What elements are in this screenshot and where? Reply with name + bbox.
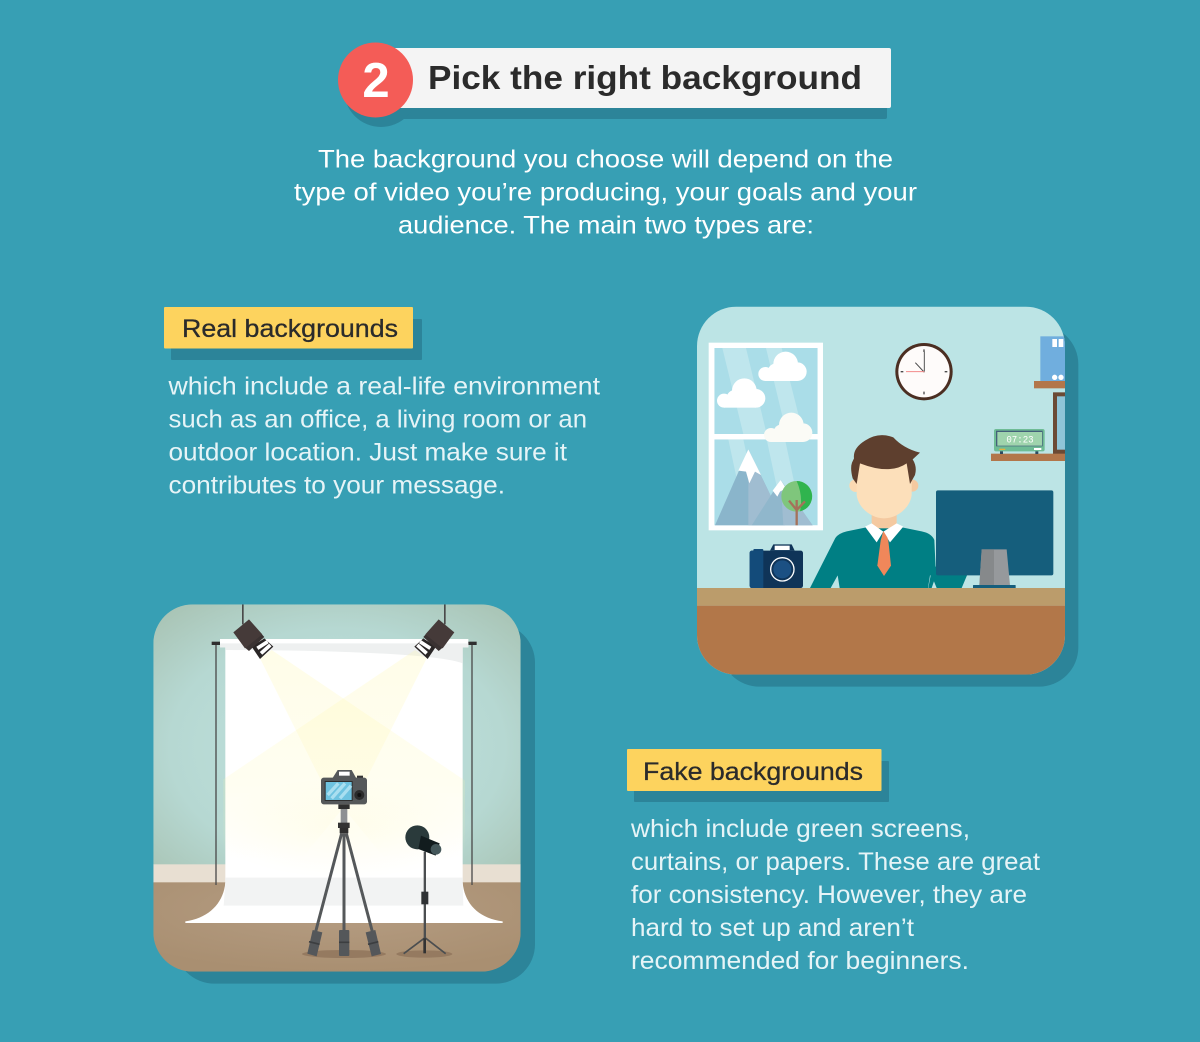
real backgrounds text: which include a real-life environment: [167, 372, 600, 400]
label: real backgrounds: Real backgrounds: [182, 315, 398, 343]
illustration: studio: [153, 604, 535, 984]
studio light: [404, 825, 446, 954]
tripod shadows: [302, 950, 386, 958]
intro text: The background you choose will depend on the: [318, 146, 893, 174]
shelf items: [991, 336, 1070, 461]
clouds: [717, 352, 812, 442]
fake backgrounds text: recommended for beginners.: [631, 947, 969, 975]
desk: [697, 588, 1065, 675]
monitor: [928, 490, 1053, 588]
backdrop: [185, 639, 503, 923]
fake backgrounds text: which include green screens,: [630, 815, 970, 843]
fake backgrounds text: for consistency. However, they are: [631, 881, 1027, 909]
fake backgrounds text: [630, 815, 1040, 975]
intro text: [294, 146, 917, 240]
person: [810, 435, 936, 588]
backdrop stands: [212, 642, 477, 885]
fake backgrounds text: curtains, or papers. These are great: [631, 848, 1040, 876]
floor: [153, 882, 521, 972]
digital clock: [994, 429, 1045, 454]
digital clock: 07:23: [1006, 434, 1034, 445]
intro text: type of video you’re producing, your goals and your: [294, 178, 917, 206]
camera on tripod: [321, 770, 367, 804]
window: [709, 343, 823, 530]
label: fake backgrounds: Fake backgrounds: [643, 758, 863, 786]
light beams: [224, 650, 465, 852]
fake backgrounds text: hard to set up and aren’t: [631, 914, 914, 942]
camera: [750, 544, 803, 588]
real backgrounds text: [167, 372, 600, 500]
label: real backgrounds: [164, 307, 422, 360]
illustration: office: [697, 307, 1078, 687]
intro text: audience. The main two types are:: [398, 212, 814, 240]
section number: 2: [362, 54, 390, 108]
tripod: [307, 804, 381, 956]
wall clock: [895, 343, 953, 400]
title: Pick the right background: [428, 59, 862, 96]
real backgrounds text: outdoor location. Just make sure it: [168, 438, 567, 466]
real backgrounds text: such as an office, a living room or an: [168, 406, 587, 434]
label: fake backgrounds: [627, 749, 889, 802]
spotlights: [233, 604, 454, 659]
section header: [338, 42, 891, 127]
baseboard: [153, 864, 521, 883]
real backgrounds text: contributes to your message.: [168, 472, 505, 500]
